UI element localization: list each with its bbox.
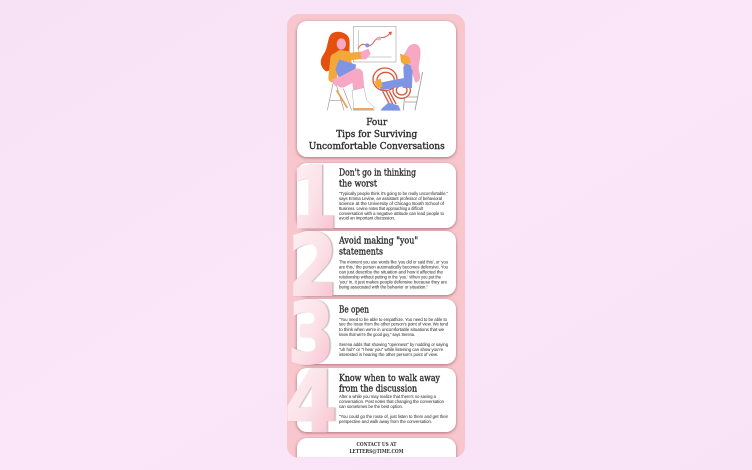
body text: are this,' the person automatically becomes defensive. You: [339, 264, 448, 270]
heading: from the discussion: [339, 384, 417, 394]
numeral 3: 3: [288, 285, 334, 384]
panel: pink column: [285, 14, 465, 468]
woman two: figure: [373, 44, 420, 111]
title: Four: [366, 117, 388, 128]
heading: [339, 168, 416, 190]
body text: After a while you may realize that there's no saving a: [339, 394, 436, 399]
title: Tips for Surviving: [336, 129, 417, 140]
heading: statements: [339, 246, 383, 258]
numeral 2: 2: [288, 217, 338, 316]
body text: [339, 317, 448, 357]
body text: 'you' in, it just makes people defensive because they are: [339, 280, 447, 284]
body text: avoid an important discussion.: [339, 216, 395, 221]
body text: can sometimes be the best option.: [339, 404, 403, 409]
panel: contact card: [295, 437, 458, 458]
illustration: two women talking: [321, 26, 423, 111]
title: Uncomfortable Conversations: [309, 141, 445, 152]
panel: tip 4: [285, 354, 456, 452]
panel: tip 1: [290, 150, 456, 248]
body text: Serena adds that showing "openness" by nodding or saying: [339, 342, 448, 347]
heading: Don't go in thinking: [339, 168, 416, 178]
body text: being associated with the behavior or situation.": [339, 284, 428, 290]
body text: "Typically people think it's going to be really uncomfortable,": [339, 191, 448, 196]
heading: Avoid making "you": [338, 236, 418, 246]
panel: tip 2: [288, 217, 456, 316]
chart board: [353, 26, 396, 62]
numeral 4: 4: [285, 354, 337, 452]
body text: "uh huh" or "I hear you" while listening can show you're: [339, 347, 443, 352]
title: [309, 117, 445, 152]
body text: conversation with a negative attitude can lead people to: [339, 211, 444, 216]
contact text: CONTACT US AT: [356, 442, 396, 448]
body text: can just describe the situation and how it affected the: [339, 270, 443, 274]
heading: [339, 373, 441, 394]
panel: tip 3: [288, 285, 456, 384]
heading: Know when to walk away: [339, 373, 441, 384]
body text: perspective and walk away from the conversation.: [339, 419, 432, 424]
body text: Business. Levine notes that approaching a difficult: [339, 206, 424, 211]
body text: [339, 394, 448, 424]
body text: [339, 260, 448, 290]
heading: Be open: [339, 304, 369, 316]
body text: says Emma Levine, an assistant professor of behavioral: [339, 196, 442, 201]
body text: interested in hearing the other person's point of view.: [339, 352, 438, 357]
body text: "You need to be able to empathize. You need to be able to: [339, 317, 447, 322]
body text: to think when we're in uncomfortable situations that we: [339, 327, 444, 332]
heading: the worst: [339, 178, 377, 190]
woman one: figure: [321, 32, 374, 110]
contact text: LETTERS@TIME.COM: [350, 448, 404, 455]
contact text: [350, 442, 404, 455]
numeral 1: 1: [290, 150, 337, 248]
woman two: chair: [402, 72, 423, 110]
body text: "You could go the route of, just listen to them and get their: [339, 414, 448, 419]
body text: The moment you use words like 'you did or said this', or 'you: [339, 260, 448, 264]
body text: science at the University of Chicago Booth School of: [339, 201, 445, 206]
woman one: chair: [327, 82, 352, 110]
body text: [339, 191, 448, 221]
body text: know that we're the good guy," says Serena.: [339, 332, 415, 337]
body text: see the issue from the other person's point of view. We tend: [339, 322, 448, 327]
panel: title card: [297, 21, 456, 157]
body text: relationship without putting in the 'you.' When you put the: [339, 274, 441, 280]
body text: conversation. Post notes that changing the conversation: [339, 399, 444, 404]
heading: [338, 236, 418, 258]
